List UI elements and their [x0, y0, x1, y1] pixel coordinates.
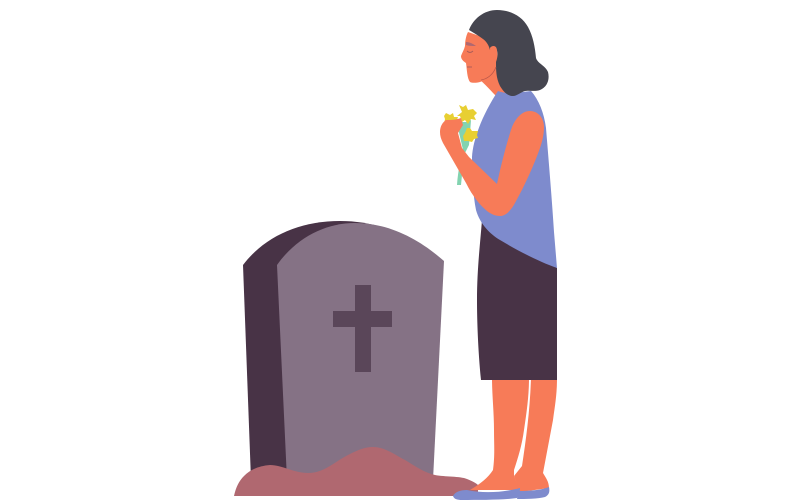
gravestone — [243, 221, 444, 480]
ear — [490, 46, 497, 59]
back leg — [514, 378, 557, 492]
back shoe — [517, 487, 549, 499]
skirt — [477, 220, 557, 380]
flower left — [444, 113, 458, 124]
front leg — [470, 378, 529, 490]
hair — [469, 10, 549, 96]
gravestone side — [243, 221, 420, 480]
eyebrow — [466, 42, 476, 46]
gravestone face — [277, 223, 444, 480]
neck — [478, 72, 510, 98]
face — [461, 32, 498, 83]
closed eye — [467, 51, 473, 52]
flower lower — [463, 128, 478, 142]
head — [461, 10, 549, 96]
woman — [440, 10, 557, 500]
flower top — [457, 105, 477, 124]
mouth — [467, 66, 472, 68]
shoes — [453, 487, 549, 500]
icon: cross — [333, 285, 392, 372]
flowers — [444, 105, 478, 185]
jaw line — [481, 67, 496, 80]
front shoe — [453, 488, 520, 500]
legs — [470, 378, 557, 492]
soil mound — [234, 447, 478, 496]
arm and hand — [440, 111, 544, 216]
stems and leaves — [457, 120, 471, 185]
blouse — [472, 91, 557, 268]
